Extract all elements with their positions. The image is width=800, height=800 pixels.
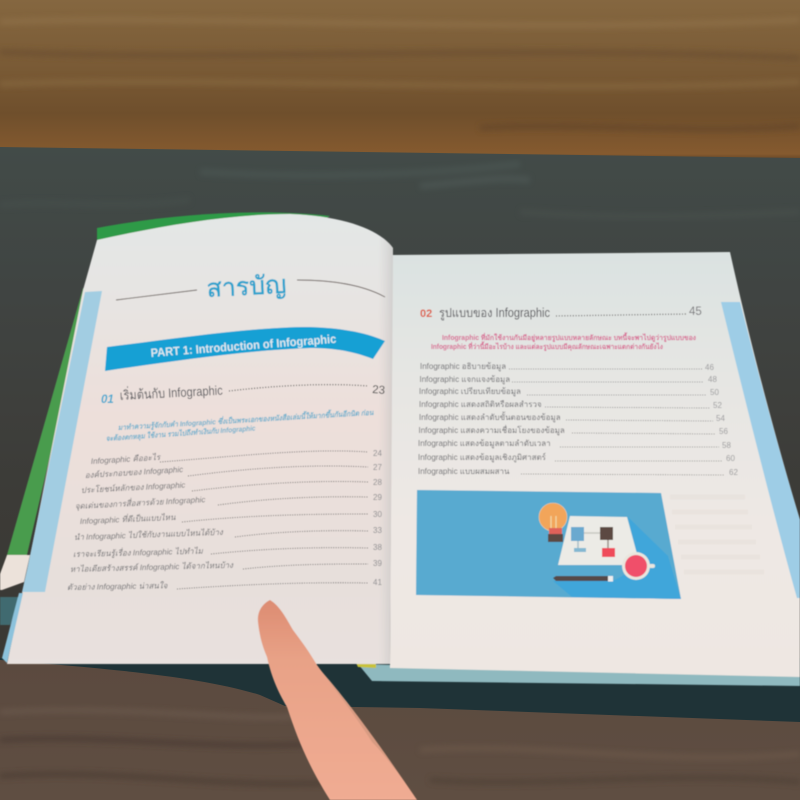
contents list: chapter 02: Infographic เปรียบเทียบข้อมูล (419, 387, 521, 397)
green front cover top (97, 212, 330, 242)
contents list: chapter 01: นำ Infographic ไปใช้กับงานแบบไหนได้บ้าง (74, 527, 224, 542)
panel: right page (390, 252, 800, 677)
blue side tab (22, 291, 102, 592)
paper (558, 516, 640, 565)
contents list: chapter 01: หาไอเดียสร้างสรรค์ Infographic ได้จากไหนบ้าง (70, 560, 234, 574)
panel: left page (2, 214, 393, 664)
blue page edge (2, 593, 23, 663)
contents list: chapter 01: เราจะเรียนรู้เรื่อง Infographic ไปทำไม (73, 545, 204, 560)
contents list: chapter 02: Infographic แสดงลำดับขั้นตอนของข้อมูล (419, 411, 561, 423)
contents list: chapter 02: 46 (705, 363, 714, 372)
heading 02: 45 (689, 306, 702, 318)
icon: light bulb (539, 503, 567, 542)
show-through text (670, 497, 764, 572)
heading 01: 01 (101, 394, 114, 406)
heading 02: รูปแบบของ Infographic (439, 306, 550, 321)
background: wooden wall (0, 0, 800, 162)
contents list: chapter 02: 48 (708, 375, 717, 384)
background: wood foreground (0, 660, 800, 800)
contents list: chapter 01: 30 (373, 510, 382, 519)
banner: part 1 (105, 327, 385, 371)
heading 02 (420, 306, 702, 321)
contents list: chapter 02: 60 (726, 454, 735, 463)
contents list: chapter 01: 29 (373, 493, 382, 502)
contents list: chapter 01: 27 (373, 463, 382, 472)
contents list: chapter 01: องค์ประกอบของ Infographic (85, 464, 183, 480)
contents list: chapter 02: 54 (716, 414, 725, 423)
title: สารบัญ (206, 271, 287, 303)
contents list: chapter 01: 33 (373, 526, 382, 535)
banner: part 1: PART 1: Introduction of Infographic (150, 332, 337, 360)
yellow cover edge (356, 663, 376, 668)
heading 02: 02 (420, 308, 432, 320)
contents list: chapter 02: Infographic อธิบายข้อมูล (420, 362, 506, 372)
title (116, 271, 385, 303)
contents list: chapter 01: จุดเด่นของการสื่อสารด้วย Infographic (75, 493, 206, 512)
pink intro text: Infographic ที่มักใช้งานกันมีอยู่หลายรูปแบบหลายลักษณะ บทนี้จะพาไปดูว่ารูปแบบของ (442, 331, 697, 343)
contents list: chapter 01: ตัวอย่าง Infographic น่าสนใจ (67, 580, 168, 592)
contents list: chapter 01: Infographic คืออะไร (91, 452, 162, 466)
pink intro text (431, 331, 697, 352)
illustration: blue panel with bulb and flowchart (416, 490, 681, 599)
contents list: chapter 02: Infographic แสดงความเชื่อมโยงของข้อมูล (418, 424, 565, 436)
book back cover edge (358, 664, 800, 686)
icon: pencil (553, 576, 613, 582)
contents list: chapter 01: 24 (373, 449, 382, 458)
flow boxes (571, 527, 615, 557)
contents list: chapter 02: Infographic แสดงข้อมูลเชิงภูมิศาสตร์ (418, 452, 547, 463)
contents list: chapter 02: 50 (710, 388, 719, 397)
blue intro text: มาทำความรู้จักกับคำ Infographic ซึ่งเป็นพระเอกของหนังสือเล่มนี้ให้มากขึ้นกันอีกนิด ก่อน (118, 407, 375, 433)
heading 01: 23 (372, 384, 385, 397)
contents list: chapter 02: 58 (722, 441, 731, 450)
heading 01: เริ่มต้นกับ Infographic (119, 382, 223, 403)
contents list: chapter 01: ประโยชน์หลักของ Infographic (81, 480, 186, 495)
background: dark teal shadow under book (0, 658, 800, 730)
teal book block (0, 597, 20, 625)
contents list: chapter 01: Infographic ที่ดีเป็นแบบไหน (80, 511, 176, 526)
contents list: chapter 01: 28 (373, 478, 382, 487)
cream cover strip (0, 555, 30, 590)
green cover left wedge (7, 288, 88, 555)
contents list: chapter 02: 62 (729, 468, 738, 477)
long shadow (553, 517, 681, 599)
gutter shadow left (378, 234, 393, 664)
contents list: chapter 01 (67, 449, 382, 592)
contents list: chapter 02 (418, 362, 738, 477)
icon: magnifier with red circle (622, 552, 655, 580)
heading 01 (101, 382, 385, 406)
contents list: chapter 02: 56 (719, 427, 728, 436)
contents list: chapter 02: Infographic แบบผสมผสาน (418, 467, 510, 476)
contents list: chapter 01: 38 (373, 543, 382, 552)
contents list: chapter 02: Infographic แจกแจงข้อมูล (420, 375, 510, 385)
background: dark table (0, 147, 800, 730)
blue side tab (721, 302, 800, 598)
pink intro text: Infographic ที่ว่านี้มีอะไรบ้าง และแต่ละรูปแบบมีคุณลักษณะเฉพาะแตกต่างกันยังไง (431, 340, 664, 352)
blue intro text: จะต้องตกหลุม ใช้งาน รวมไปถึงทำเงินกับ Infographic (106, 424, 256, 444)
contents list: chapter 01: 39 (373, 559, 382, 568)
icon: finger and hand (258, 600, 417, 800)
contents list: chapter 01: 41 (373, 578, 382, 587)
blue intro text (106, 407, 375, 444)
contents list: chapter 02: Infographic แสดงสถิติหรือผลสำรวจ (419, 400, 542, 409)
contents list: chapter 02: Infographic แสดงข้อมูลตามลำดับเวลา (418, 439, 551, 449)
contents list: chapter 02: 52 (713, 401, 722, 410)
